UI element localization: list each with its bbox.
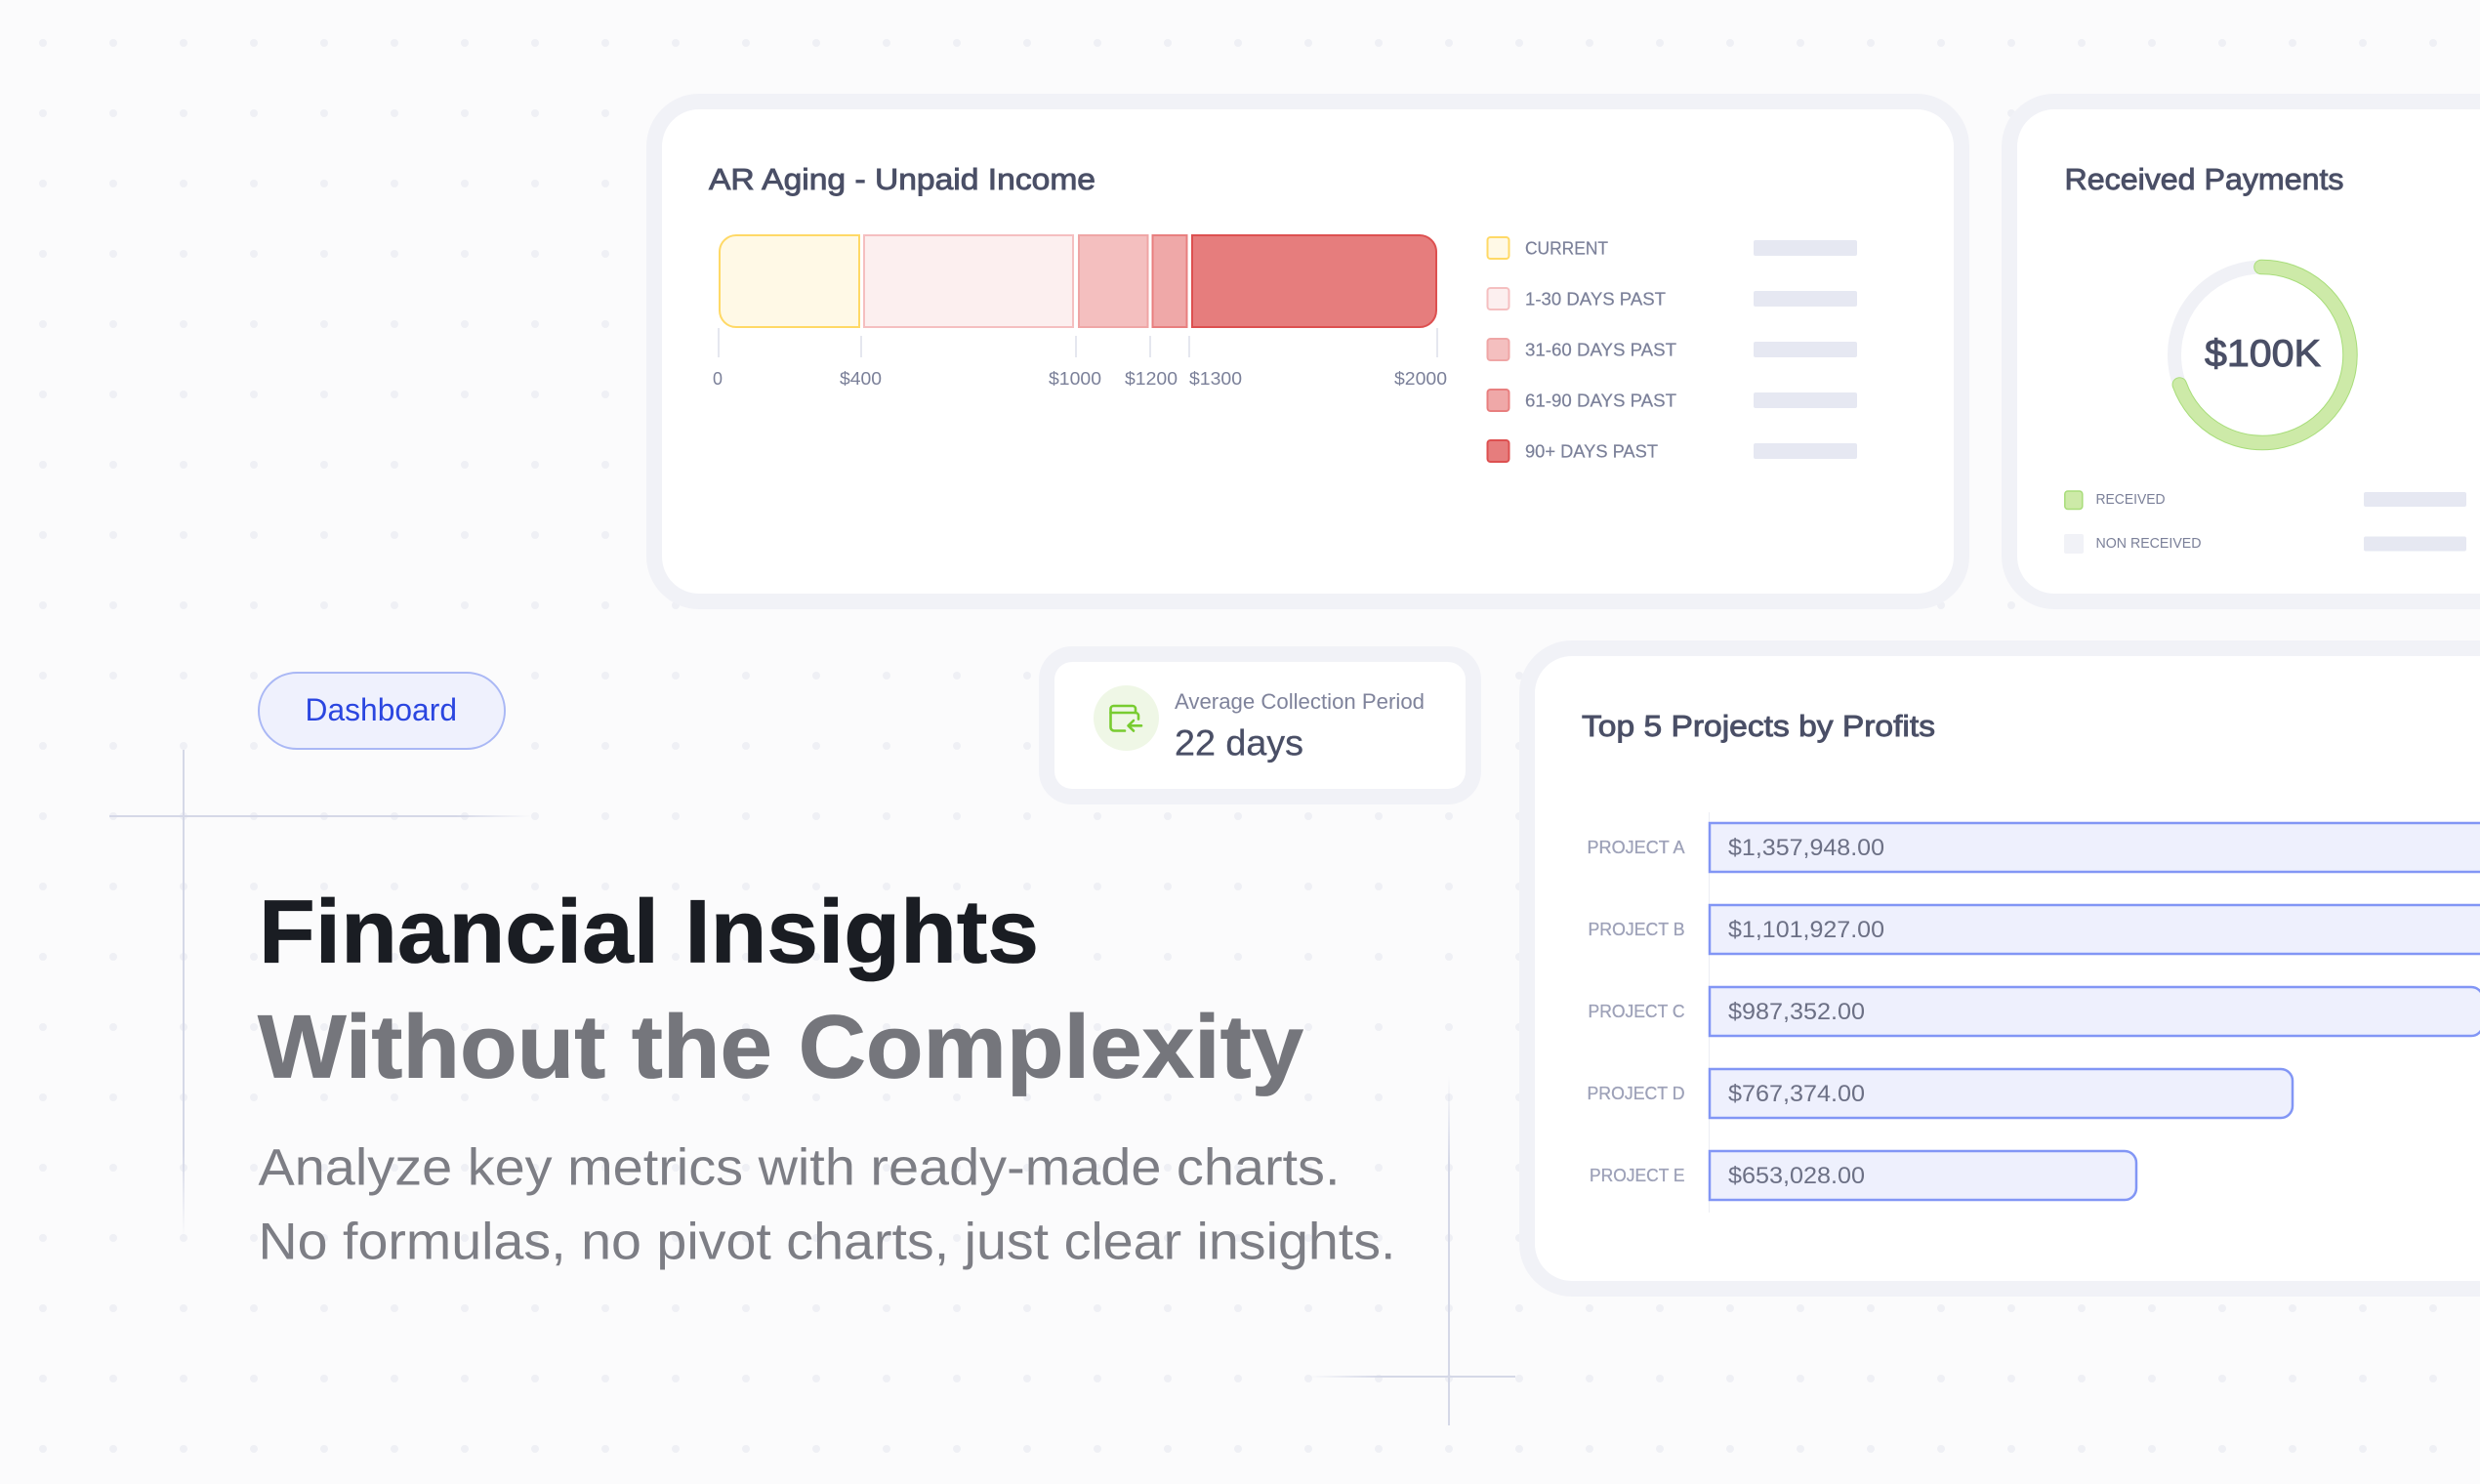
legend: NON RECEIVED: [2095, 535, 2202, 552]
axis labels: $1300: [1189, 368, 1242, 389]
axis labels: $2000: [1394, 368, 1447, 389]
project labels: PROJECT E: [1590, 1166, 1685, 1185]
metric label: Average Collection Period: [1175, 689, 1425, 714]
legend labels: 31-60 DAYS PAST: [1525, 340, 1676, 359]
bar chart: [1710, 823, 2480, 1200]
stacked bar chart: [720, 235, 1436, 327]
legend labels: [1525, 238, 1676, 461]
project labels: PROJECT C: [1588, 1002, 1685, 1021]
title: Financial Insights: [259, 883, 1039, 982]
title: Without the Complexity: [258, 998, 1303, 1097]
badge: Dashboard: Dashboard: [305, 692, 457, 727]
legend: [2064, 491, 2466, 554]
legend: RECEIVED: [2095, 491, 2166, 508]
heading: Top 5 Projects: Top 5 Projects by Profits: [1582, 709, 1935, 743]
legend labels: 90+ DAYS PAST: [1525, 441, 1658, 461]
project labels: PROJECT D: [1588, 1084, 1685, 1103]
title: [258, 883, 1303, 1097]
heading: Received Payments: Received Payments: [2064, 162, 2343, 196]
legend value placeholders: [1754, 240, 1857, 459]
axis labels: $1000: [1049, 368, 1101, 389]
panel: AR Aging: [646, 94, 1969, 609]
legend labels: 1-30 DAYS PAST: [1525, 289, 1666, 309]
project values: $767,374.00: [1728, 1081, 1865, 1107]
axis ticks: [718, 328, 1438, 357]
legend labels: CURRENT: [1525, 238, 1608, 258]
project values: $653,028.00: [1728, 1163, 1865, 1189]
donut chart: [2174, 267, 2350, 443]
donut value: $100K: [2205, 333, 2321, 375]
subtitle text block: No formulas, no pivot charts, just clear insights.: [258, 1213, 1396, 1271]
legend labels: 61-90 DAYS PAST: [1525, 391, 1676, 410]
project labels: [1588, 838, 1685, 1185]
icon: wallet with arrow: [1094, 685, 1159, 751]
subtitle text block: [258, 1138, 1396, 1271]
badge: Dashboard: [259, 673, 505, 749]
project values: $1,101,927.00: [1728, 917, 1884, 943]
project labels: PROJECT B: [1588, 920, 1685, 939]
project values: [1728, 835, 1884, 1189]
subtitle text block: Analyze key metrics with ready-made charts.: [258, 1138, 1340, 1197]
legend: [1488, 237, 1509, 462]
bar chart axis: [1709, 812, 1710, 1213]
project labels: PROJECT A: [1588, 838, 1685, 857]
metric value: 22 days: [1175, 722, 1303, 763]
project values: $1,357,948.00: [1728, 835, 1884, 861]
panel: Received Payments: [2002, 94, 2480, 609]
axis labels: $400: [840, 368, 882, 389]
axis labels: $1200: [1125, 368, 1178, 389]
axis labels: [713, 368, 1447, 389]
panel: Average Collection Period: [1039, 646, 1481, 804]
axis labels: 0: [713, 368, 723, 389]
heading: AR Aging: AR Aging - Unpaid Income: [709, 162, 1095, 196]
project values: $987,352.00: [1728, 999, 1865, 1025]
panel: Top 5 Projects by Profits: [1519, 640, 2480, 1297]
